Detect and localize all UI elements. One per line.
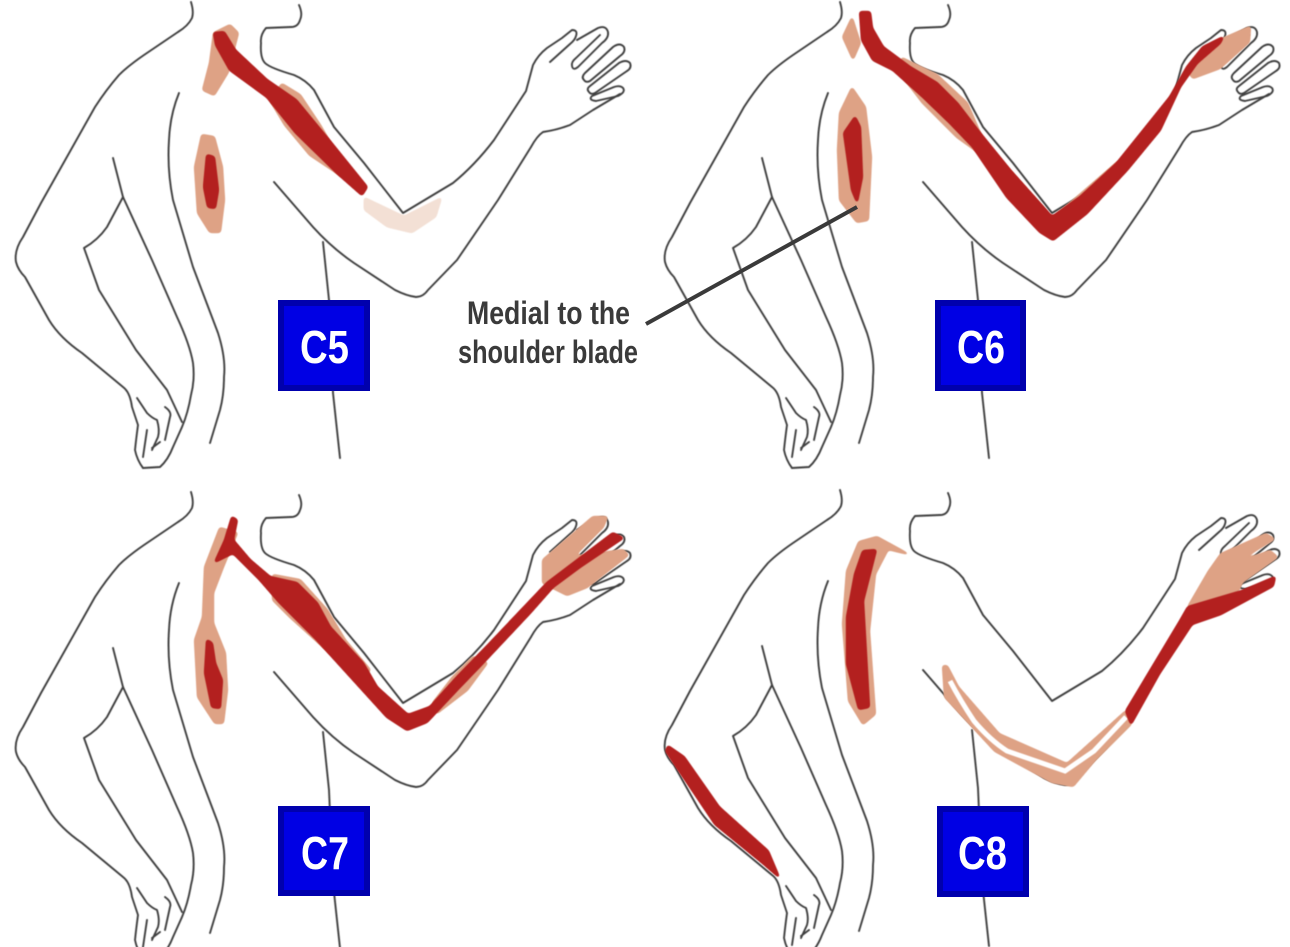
panel: C5 (16, 2, 631, 468)
panel: C6 (665, 2, 1280, 468)
C8 body outline (665, 490, 1280, 947)
C6 pain regions (838, 12, 1250, 240)
C5 body outline (16, 2, 631, 468)
C7 badge: C7 (301, 827, 349, 879)
C6 badge: C6 (957, 321, 1005, 373)
C6 body outline (665, 2, 1280, 468)
C8 pain regions (666, 534, 1277, 877)
C6 badge (935, 300, 1026, 391)
panel: C8 (665, 490, 1280, 947)
C5 pain regions (195, 25, 442, 233)
arrow: leader line (646, 207, 857, 324)
callout text (458, 295, 638, 370)
callout text: shoulder blade (458, 334, 638, 370)
panel: C7 (16, 492, 631, 947)
callout text: Medial to the (467, 295, 630, 331)
C8 badge: C8 (958, 827, 1007, 879)
C7 badge (278, 806, 370, 896)
callout: medial to the shoulder blade (458, 207, 857, 370)
C7 body outline (16, 492, 631, 947)
C5 badge (278, 300, 370, 391)
C5 badge: C5 (300, 321, 349, 373)
C7 pain regions (195, 517, 628, 730)
C8 badge (937, 806, 1029, 897)
